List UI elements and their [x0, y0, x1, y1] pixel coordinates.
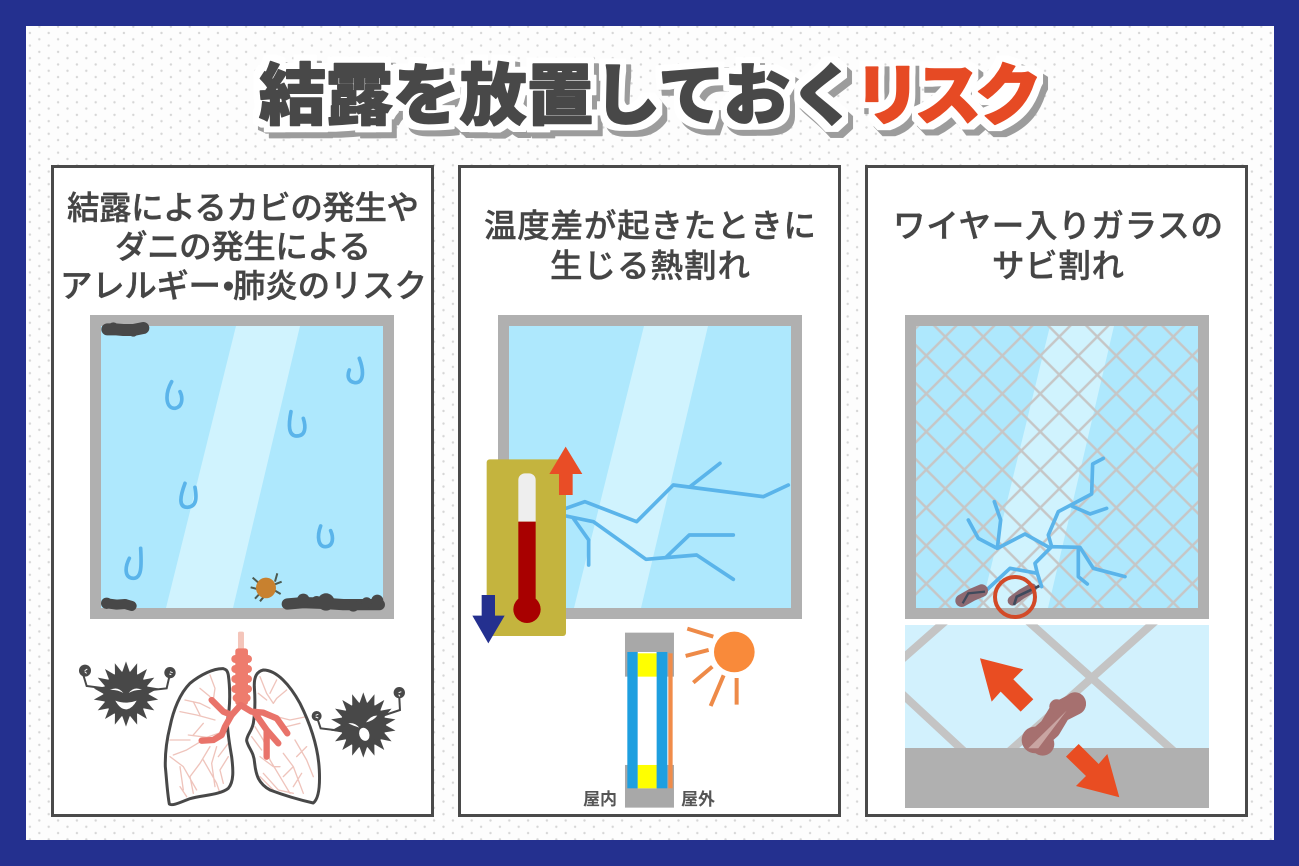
panel frame — [52, 166, 432, 816]
left lung outline — [165, 669, 233, 805]
heading: 温度差が起きたときに — [484, 208, 816, 244]
panel: mold and allergy risk — [52, 166, 432, 816]
thermometer — [487, 459, 566, 636]
icon: dust mite — [251, 573, 282, 601]
heading: 結露によるカビの発生や — [67, 190, 419, 226]
heading: アレルギー — [60, 268, 221, 304]
cracks — [968, 458, 1125, 590]
icon: sun — [686, 629, 755, 706]
arrow: temperature up — [549, 447, 582, 495]
heading: サビ割れ — [992, 248, 1124, 284]
label: indoor: 屋内 — [583, 790, 617, 809]
icon: germ right — [312, 687, 405, 758]
double glazing cross-section — [625, 633, 674, 808]
arrow: down-right — [1066, 744, 1119, 797]
wires — [900, 620, 1175, 752]
rust spots — [962, 586, 1039, 605]
heading — [60, 190, 427, 304]
bronchi — [202, 700, 287, 757]
heading: 生じる熱割れ — [550, 248, 750, 284]
arrow: up-left — [980, 658, 1033, 712]
right lung outline — [247, 670, 320, 803]
rust blob — [1022, 692, 1086, 756]
window with condensation — [90, 315, 394, 619]
illustration: lungs and germs — [79, 632, 405, 805]
label: outdoor: 屋外 — [681, 790, 715, 809]
water drops — [126, 358, 362, 578]
title: リスク — [854, 59, 1042, 134]
panel frame — [460, 166, 840, 816]
lung branches — [170, 675, 313, 797]
heading: • — [223, 268, 234, 304]
icon: germ left — [79, 661, 176, 727]
heading: ワイヤー入りガラスの — [893, 208, 1223, 244]
title: 結露を放置しておく — [259, 59, 857, 134]
heading — [893, 208, 1223, 284]
red highlight circle — [995, 577, 1035, 617]
enlarged detail — [900, 620, 1209, 808]
heading: ダニの発生による — [115, 229, 371, 265]
trachea — [231, 632, 252, 705]
cracked window — [498, 315, 802, 619]
cracks — [566, 463, 788, 579]
panel: wired glass rust cracking — [866, 166, 1246, 816]
heading — [484, 208, 816, 284]
heading: 肺炎のリスク — [233, 268, 427, 304]
mold patches — [101, 322, 383, 612]
wired window — [905, 315, 1209, 619]
arrow: temperature down — [472, 595, 505, 643]
panel frame — [866, 166, 1246, 816]
panel: thermal cracking — [460, 166, 840, 816]
